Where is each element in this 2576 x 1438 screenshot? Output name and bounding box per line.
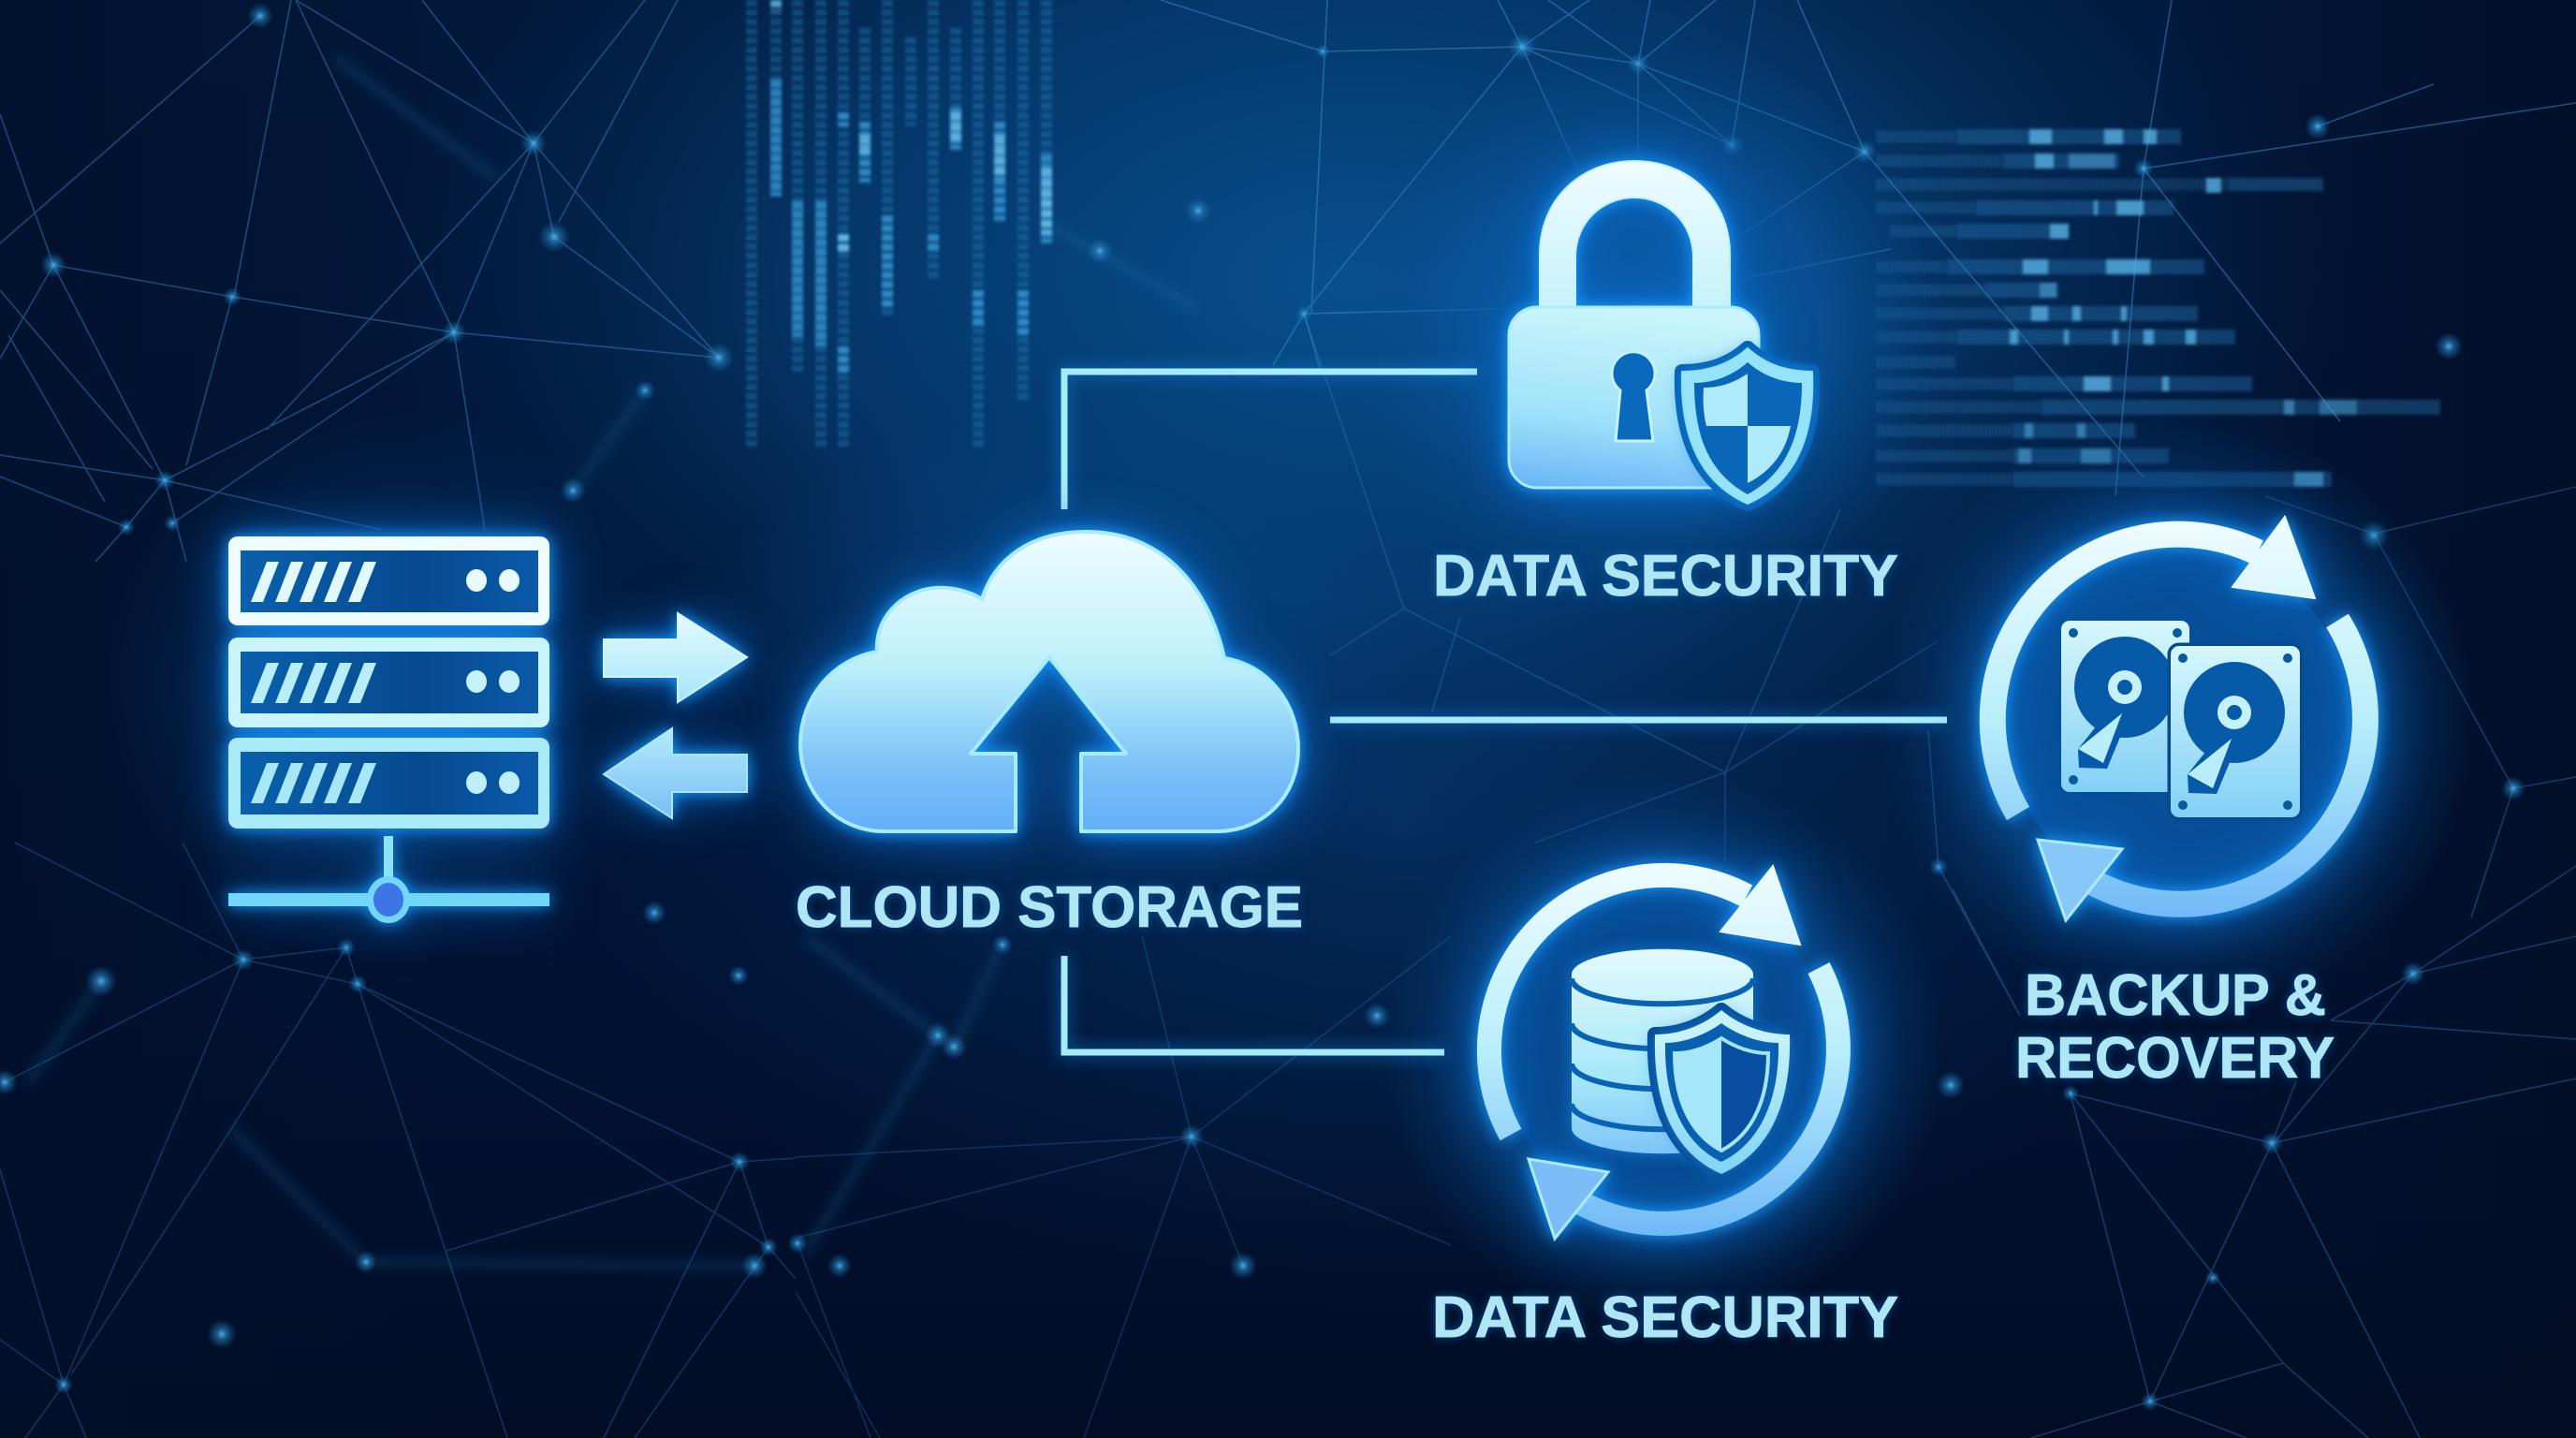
icon: backup ring with hard drives bbox=[1993, 517, 2365, 920]
label: data security top: DATA SECURITY bbox=[1433, 544, 1898, 609]
server frames bbox=[228, 536, 549, 923]
icon: database ring with shield bbox=[1489, 866, 1838, 1239]
connector: cloud to backup bbox=[1330, 717, 1947, 723]
icon: server rack bbox=[228, 536, 549, 923]
server unit 3 bbox=[241, 752, 538, 814]
shield quadrants bbox=[1704, 374, 1791, 483]
shield ring bbox=[1655, 1010, 1790, 1174]
arrow: from cloud bbox=[604, 728, 747, 818]
label: data security bottom: DATA SECURITY bbox=[1432, 1285, 1898, 1350]
shield inner bbox=[1665, 1023, 1778, 1162]
label: cloud storage: CLOUD STORAGE bbox=[796, 875, 1303, 940]
shield inner bbox=[1694, 362, 1802, 494]
rotating arrows bbox=[1489, 866, 1838, 1239]
connector: cloud to lock bbox=[1064, 372, 1477, 509]
halo behind backup ring bbox=[1877, 419, 2476, 1019]
shield ring bbox=[1682, 348, 1812, 504]
icon: cloud with upload arrow bbox=[800, 532, 1298, 831]
drive 1 bbox=[2061, 621, 2189, 792]
connector: cloud to database bbox=[1064, 956, 1444, 1052]
ring interior bbox=[1500, 886, 1829, 1215]
shield backing bbox=[1655, 1010, 1790, 1174]
soft light streaks background bbox=[28, 57, 1198, 1266]
server node center bbox=[373, 883, 403, 917]
padlock bbox=[1509, 161, 1759, 488]
code lines backdrop bbox=[1877, 129, 2440, 487]
keyhole bbox=[1612, 352, 1655, 441]
halo behind server bbox=[98, 403, 679, 964]
server unit 2 bbox=[241, 652, 538, 713]
shield backing bbox=[1682, 348, 1812, 504]
drive 2 bbox=[2171, 646, 2300, 817]
rotating arrows bbox=[1993, 517, 2365, 920]
ring interior bbox=[2002, 545, 2350, 893]
label: backup and recovery: BACKUP & bbox=[2025, 963, 2326, 1028]
halo behind cloud bbox=[674, 412, 1423, 955]
database cylinder bbox=[1572, 949, 1753, 1153]
icon: padlock with shield bbox=[1509, 161, 1812, 504]
shield halves bbox=[1675, 1038, 1768, 1151]
label: backup and recovery: RECOVERY bbox=[2015, 1026, 2334, 1091]
arrow: to cloud bbox=[604, 613, 747, 702]
matrix rain columns bbox=[752, 0, 1046, 449]
label: backup and recovery bbox=[2015, 963, 2334, 1091]
halo behind database ring bbox=[1383, 770, 1945, 1331]
halo behind lock bbox=[1348, 37, 1947, 618]
server unit 1 bbox=[241, 550, 538, 612]
